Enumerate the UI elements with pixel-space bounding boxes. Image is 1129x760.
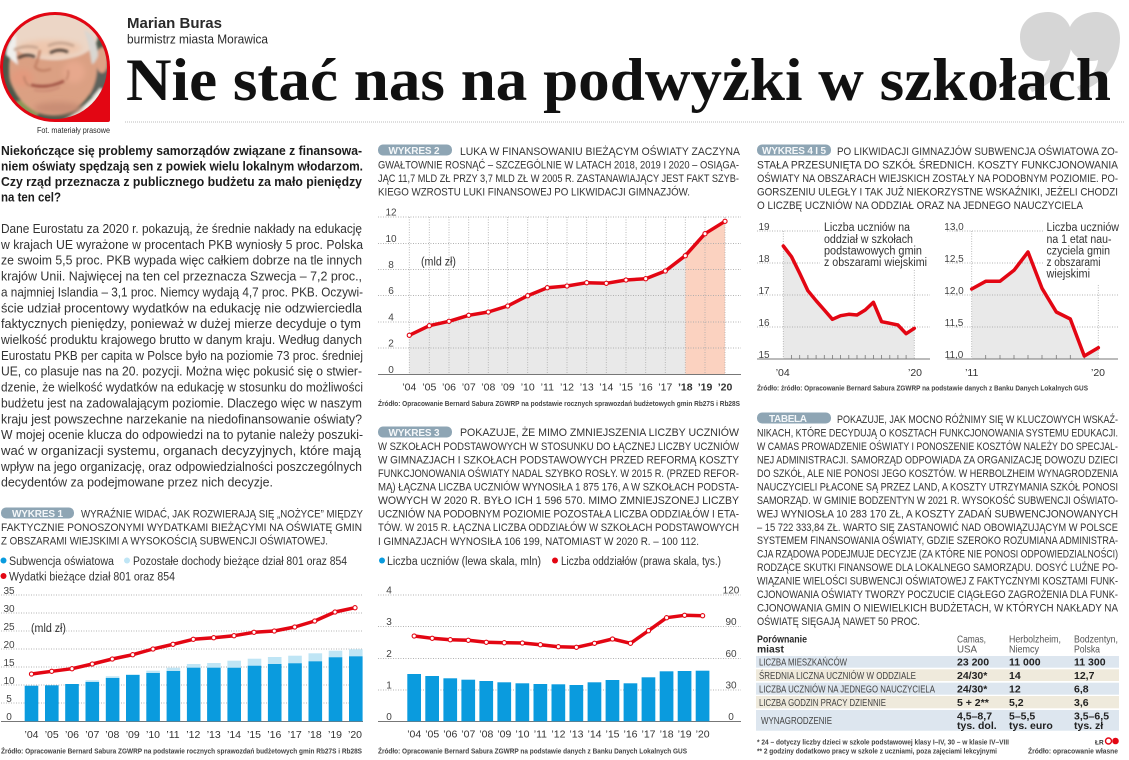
chart: liczba uczniów i oddziałów: ’20 (696, 728, 710, 740)
tag: wykres 2 (378, 144, 452, 157)
chart: uczniowie na oddział: oddział w szkołach (824, 234, 913, 246)
chart: luka w finansowaniu: ’06 (442, 382, 456, 394)
chart: luka w finansowaniu: 12 (385, 208, 397, 218)
chart: luka w finansowaniu: ’16 (639, 382, 653, 394)
body text: a najmniej Islandia – 3,1 proc. Niemcy wydają 4,7 proc. PKB. Oczywi- (1, 284, 363, 299)
chart: uczniowie na etat nauczyciela: wiejskimi (1046, 268, 1090, 280)
legend: wykres 3: Liczba uczniów (lewa skala, mln) (387, 556, 541, 568)
row: godziny pracy: 3,6 (1074, 697, 1089, 709)
photo credit: Fot. materiały prasowe (37, 126, 110, 135)
chart: uczniowie na oddział: 15 (758, 350, 770, 361)
body text: W mojej ocenie klucza do odpowiedzi na to pytanie należy poszuki- (1, 427, 363, 442)
tag: tabela (757, 412, 831, 425)
legend: wykres 1: Subwencja oświatowa (9, 556, 115, 568)
source: wykres 2: Źródło: Opracowanie Bernard Sabura ZGWRP na podstawie rocznych sprawozdań budżetowych gmin Rb27S i Rb28S (378, 399, 740, 408)
chart: subwencja i wydatki: 5 (6, 694, 12, 705)
tag: tabela: TABELA (769, 414, 807, 425)
lead paragraph: Niekończące się problemy samorządów związane z finansowa- (1, 143, 362, 158)
body text: dzenie, że wielkość wydatków na edukację w stosunku do możliwości (1, 380, 363, 395)
legend: wykres 1: Wydatki bieżące dział 801 oraz 854 (9, 572, 176, 584)
chart: liczba uczniów i oddziałów: ’14 (587, 728, 602, 740)
footnotes (757, 738, 1009, 756)
row: godziny pracy: 5,2 (1009, 697, 1024, 709)
row: liczba mieszkańców: LICZBA MIESZKAŃCÓW (759, 656, 847, 668)
chart: liczba uczniów i oddziałów: ’07 (461, 728, 475, 740)
chart: luka w finansowaniu: ’14 (599, 382, 613, 394)
tag: wykres 3: WYKRES 3 (388, 428, 440, 439)
tag: wykres 3 (378, 426, 452, 439)
row: godziny pracy: LICZBA GODZIN PRACY DZIENNIE (759, 697, 886, 709)
chart: luka w finansowaniu: 2 (388, 338, 394, 350)
author role: burmistrz miasta Morawica (127, 32, 268, 46)
chart: luka w finansowaniu (378, 208, 741, 394)
chart: luka w finansowaniu: ’10 (521, 382, 535, 394)
row: wynagrodzenie (756, 710, 1119, 732)
chart: subwencja i wydatki: 30 (3, 604, 15, 615)
icon: decorative quotation mark (1020, 12, 1120, 92)
row: średnia liczba uczniów w oddziale: 14 (1009, 670, 1021, 682)
chart: luka w finansowaniu: ’20 (718, 382, 732, 394)
chart: luka w finansowaniu: ’17 (658, 382, 672, 394)
row: liczba mieszkańców (756, 656, 1119, 668)
chart: liczba uczniów i oddziałów: 0 (728, 712, 734, 723)
chart: liczba uczniów i oddziałów: ’11 (534, 728, 547, 740)
chart: liczba uczniów i oddziałów: 60 (725, 649, 737, 660)
body text: faktycznych pieniędzy, ponieważ w dużej mierze decyduje o tym (1, 316, 361, 331)
chart: uczniowie na etat nauczyciela: z obszarami (1046, 257, 1100, 269)
chart: liczba uczniów i oddziałów: 0 (386, 712, 392, 723)
chart: subwencja i wydatki: ’15 (247, 729, 261, 741)
chart: liczba uczniów i oddziałów: ’08 (479, 728, 493, 740)
chart: luka w finansowaniu: ’11 (541, 382, 554, 394)
chart: subwencja i wydatki: ’20 (348, 729, 362, 741)
panel: wykres 1 (0, 508, 363, 756)
description: wykres 3: W GIMNAZJACH I SZKOŁACH PODSTAWOWYCH PRZED REFORMĄ KOSZTY (378, 454, 739, 466)
chart: liczba uczniów i oddziałów: ’10 (515, 728, 530, 740)
chart: uczniowie na oddział: podstawowych gmin (824, 246, 922, 258)
row: wynagrodzenie: 3,5–6,5 (1074, 710, 1109, 722)
row: średnia liczba uczniów w oddziale: ŚREDNIA LICZNA UCZNIÓW W ODDZIALE (759, 669, 916, 682)
chart: luka w finansowaniu: ’08 (481, 382, 495, 394)
body text: kraju jest powszechne narzekanie na niedofinansowanie oświaty? (1, 411, 362, 426)
chart: subwencja i wydatki: ’19 (328, 729, 342, 741)
chart: subwencja i wydatki: 25 (3, 622, 15, 633)
row: liczba mieszkańców: 23 200 (957, 656, 989, 668)
chart: luka w finansowaniu: ’19 (698, 382, 712, 394)
chart: uczniowie na oddział: z obszarami wiejskimi (824, 257, 927, 269)
chart: uczniowie na oddział: ’04 (776, 367, 790, 379)
row: średnia liczba uczniów w oddziale (756, 669, 1119, 682)
body text: Eurostatu PKB per capita w Polsce było na poziomie 73 proc. średniej (1, 348, 363, 363)
chart: uczniowie na oddział: Liczba uczniów na (824, 222, 911, 234)
row: uczniowie na nauczyciela: LICZBA UCZNIÓW NA JEDNEGO NAUCZYCIELA (759, 682, 935, 696)
panel: tabela (756, 412, 1119, 756)
chart: luka w finansowaniu: ’18 (678, 382, 693, 394)
row: wynagrodzenie: tys. euro (1009, 720, 1053, 732)
author name: Marian Buras (127, 15, 222, 32)
description: wykres 3: TÓW. W 2015 R. ŁĄCZNA LICZBA ODDZIAŁÓW W SZKOŁACH PODSTAWOWYCH (378, 521, 739, 534)
chart: subwencja i wydatki: ’08 (105, 729, 119, 741)
body text (0, 221, 364, 490)
tag: wykres 4 i 5: WYKRES 4 I 5 (762, 146, 826, 157)
chart: subwencja i wydatki: ’18 (308, 729, 322, 741)
chart: liczba uczniów i oddziałów (378, 586, 741, 740)
chart: liczba uczniów i oddziałów: ’19 (678, 728, 692, 740)
description: wykres 1: Z OBSZARAMI WIEJSKIMI A WYSOKOŚCIĄ SUBWENCJI OŚWIATOWEJ. (1, 534, 328, 548)
chart: liczba uczniów i oddziałów: ’09 (497, 728, 511, 740)
chart: liczba uczniów i oddziałów: ’17 (641, 728, 656, 740)
description: wykres 1: FAKTYCZNIE PONOSZONYMI WYDATKAMI BIEŻĄCYMI NA OŚWIATĘ GMIN (1, 521, 362, 534)
source: wykres 1: Źródło: Opracowanie Bernard Sabura ZGWRP na podstawie rocznych sprawozdań budżetowych gmin Rb27S i Rb28S (1, 746, 362, 756)
table header: Bodzentyn, (1074, 634, 1118, 646)
body text: budżetu jest na zadowalającym poziomie. Dlaczego więc w naszym (1, 396, 362, 410)
body text: krajów Unii. Najwięcej na ten cel przeznacza Szwecja – 7,2 proc., (1, 269, 362, 284)
chart: subwencja i wydatki: ’07 (85, 729, 99, 741)
description: wykres 3 (378, 426, 739, 548)
chart: liczba uczniów i oddziałów: ’05 (425, 728, 439, 740)
chart: liczba uczniów i oddziałów: ’04 (407, 728, 421, 740)
chart: uczniowie na etat nauczyciela: ’11 (965, 367, 978, 379)
chart: subwencja i wydatki: 10 (3, 676, 15, 687)
description: wykres 3: UCZNIÓW NA PODOBNYM POZIOMIE POZOSTAŁA LICZBA ODDZIAŁÓW I ETA- (378, 508, 739, 520)
table header: Niemcy (1009, 644, 1040, 656)
chart: uczniowie na etat nauczyciela: 11,5 (945, 318, 964, 329)
lead paragraph: na ten cel? (1, 190, 61, 204)
title: Nie stać nas na podwyżki w szkołach (126, 47, 1111, 113)
row: godziny pracy: 5 + 2** (957, 697, 990, 709)
row: średnia liczba uczniów w oddziale: 24/30* (957, 670, 988, 682)
body text: ście udział procentowy wydatków na edukację nie odzwierciedla (1, 300, 363, 315)
source: wykres 3: Źródło: Opracowanie Bernard Sabura ZGWRP na podstawie danych z Banku Danych Lokalnych GUS (378, 746, 687, 756)
legend: wykres 3 (379, 556, 721, 568)
row: godziny pracy (756, 696, 1119, 709)
description: wykres 3: W SZKOŁACH PODSTAWOWYCH W STOSUNKU DO ŁĄCZNEJ LICZBY UCZNIÓW (378, 440, 739, 453)
chart: subwencja i wydatki: 35 (3, 586, 15, 597)
chart: luka w finansowaniu: ’07 (462, 382, 476, 394)
chart: uczniowie na oddział: 19 (758, 222, 770, 233)
chart: luka w finansowaniu: ’05 (422, 382, 436, 394)
footnotes: ** 2 godziny dodatkowo pracy w szkole z uczniami, poza zajęciami lekcyjnymi (757, 746, 997, 756)
tag: wykres 1: WYKRES 1 (12, 509, 63, 520)
chart: subwencja i wydatki: ’06 (65, 729, 79, 741)
chart: liczba uczniów i oddziałów: 30 (725, 680, 737, 692)
author initials and icons: ŁR (1095, 740, 1104, 746)
row: wynagrodzenie: tys. zł (1074, 720, 1103, 732)
body text: decydentów za podejmowane przez nich decyzje. (1, 475, 273, 490)
lead paragraph: Czy rząd przeznacza z publicznego budżetu za mało pieniędzy (1, 174, 363, 189)
body text: wpływ na jego organizację, oraz odpowiedzialności poszczególnych (0, 459, 362, 474)
row: uczniowie na nauczyciela: 6,8 (1074, 684, 1089, 696)
description: wykres 3: POKAZUJE, ŻE MIMO ZMNIEJSZENIA LICZBY UCZNIÓW (460, 426, 739, 439)
description: tabela (757, 413, 1118, 628)
chart: uczniowie na etat nauczyciela: 12,5 (944, 254, 964, 265)
chart: subwencja i wydatki: ’10 (146, 729, 160, 741)
chart: luka w finansowaniu: 4 (388, 312, 394, 324)
panel: wykres 3 (378, 426, 741, 756)
chart: subwencja i wydatki: ’04 (24, 729, 39, 741)
row: uczniowie na nauczyciela: 24/30* (957, 684, 988, 696)
chart: uczniowie na etat nauczyciela: 11,0 (945, 350, 964, 361)
chart: luka w finansowaniu: 0 (388, 365, 394, 376)
description: wykres 2 (378, 145, 740, 198)
chart: liczba uczniów i oddziałów: 4 (386, 586, 392, 596)
chart: uczniowie na oddział: 18 (758, 254, 770, 265)
description: wykres 3: MĄ) ŁĄCZNA LICZBA UCZNIÓW WYNOSIŁA 1 875 176, A W SZKOŁACH PODSTA- (378, 480, 739, 494)
chart: uczniowie na etat nauczyciela (944, 222, 1122, 379)
table header: Porównanie (757, 634, 807, 646)
description: wykres 3: FUNKCJONOWANIA OŚWIATY NADAL SZYBKO ROSŁY. W 2015 R. (PRZED REFOR- (378, 467, 739, 480)
chart: liczba uczniów i oddziałów: ’18 (660, 728, 674, 740)
row: liczba mieszkańców: 11 000 (1009, 656, 1041, 668)
chart: luka w finansowaniu: 6 (388, 286, 394, 297)
table header (757, 634, 1118, 656)
portrait photo (0, 12, 110, 122)
chart: luka w finansowaniu: 8 (388, 260, 394, 271)
row: średnia liczba uczniów w oddziale: 12,7 (1074, 670, 1095, 682)
description: wykres 2: KIEGO WZROSTU LUKI FINANSOWEJ PO LIKWIDACJI GIMNAZJÓW. (378, 186, 690, 198)
description: wykres 3: I GIMNAZJACH WYNOSIŁA 106 199, NATOMIAST W 2020 R. – 100 112. (378, 536, 699, 548)
chart: uczniowie na etat nauczyciela: Liczba uczniów (1046, 222, 1120, 234)
chart: subwencja i wydatki: ’17 (288, 729, 302, 741)
chart: subwencja i wydatki: ’13 (207, 729, 221, 741)
description: tabela: OŚWIATĘ SIĘGAJĄ NAWET 50 PROC. (757, 615, 920, 628)
chart: subwencja i wydatki: 15 (3, 658, 15, 669)
row: wynagrodzenie: 5–5,5 (1009, 710, 1035, 722)
chart: uczniowie na oddział (757, 222, 930, 379)
chart: subwencja i wydatki: ’05 (45, 729, 59, 741)
chart: liczba uczniów i oddziałów: 90 (725, 617, 737, 628)
chart: uczniowie na oddział: 16 (758, 318, 770, 329)
chart: subwencja i wydatki: ’12 (186, 729, 200, 741)
body text: UE, co plasuje nas na 20. pozycji. Można więc pokusić się o stwier- (1, 364, 362, 379)
row: uczniowie na nauczyciela (756, 682, 1119, 696)
chart: subwencja i wydatki: ’11 (166, 729, 180, 741)
body text: ze swoim 5,5 proc. PKB wypada więc całkiem dobrze na tle innych (1, 253, 362, 268)
tag: wykres 1 (1, 508, 74, 520)
chart: liczba uczniów i oddziałów: 2 (386, 649, 392, 660)
chart: uczniowie na etat nauczyciela: ’20 (1091, 367, 1105, 379)
chart: liczba uczniów i oddziałów: ’16 (623, 728, 638, 740)
table header: Polska (1074, 644, 1100, 656)
chart: luka w finansowaniu: ’13 (580, 382, 594, 394)
source: wykresy 4 i 5: Źródło: źródło: Opracowanie Bernard Sabura ZGWRP na podstawie danych z Banku Danych Lokalnych GUS (757, 384, 1088, 392)
footnotes: * 24 – dotyczy liczby dzieci w szkole podstawowej klasy I–IV, 30 – w klasie IV–VIII (757, 738, 1009, 746)
description: wykres 1: WYRAŹNIE WIDAĆ, JAK ROZWIERAJĄ SIĘ „NOŻYCE” MIĘDZY (81, 508, 363, 520)
table header: Herbolzheim, (1009, 634, 1061, 646)
chart: liczba uczniów i oddziałów: ’15 (605, 728, 620, 740)
description: wykresy 4 i 5 (757, 145, 1118, 212)
chart: liczba uczniów i oddziałów: ’06 (443, 728, 457, 740)
lead paragraph: niem oświaty spędzają sen z powiek wielu lokalnym włodarzom. (1, 158, 363, 174)
description: wykres 2: JĄC 11,7 MLD ZŁ PRZY 3,7 MLD ZŁ W 2005 R. ZASTANAWIAJĄCY JEST FAKT SZYB- (378, 173, 739, 185)
chart: uczniowie na oddział: 17 (758, 286, 770, 297)
author initials and icons (1095, 738, 1119, 746)
row: wynagrodzenie: tys. dol. (957, 720, 997, 732)
body text: wać w organizacji systemu, organach decyzyjnych, które mają (0, 443, 362, 458)
legend: wykres 1 (0, 556, 348, 584)
chart: liczba uczniów i oddziałów: 3 (386, 617, 392, 628)
chart: liczba uczniów i oddziałów: ’13 (569, 728, 584, 740)
description: wykres 2: GWAŁTOWNIE ROSNĄĆ – SZCZEGÓLNIE W LATACH 2018, 2019 I 2020 – OSIĄGA- (378, 158, 739, 172)
chart: liczba uczniów i oddziałów: 1 (386, 680, 392, 692)
description: wykres 1 (1, 508, 363, 548)
chart: subwencja i wydatki: 0 (6, 712, 12, 723)
chart: luka w finansowaniu: ’12 (560, 382, 574, 394)
chart: uczniowie na etat nauczyciela: 12,0 (944, 286, 964, 297)
table header: USA (957, 644, 977, 656)
row: wynagrodzenie: WYNAGRODZENIE (761, 715, 832, 727)
description: wykres 3: WOWYCH W 2020 R. BYŁO ICH 1 596 570. MIMO ZMNIEJSZONEJ LICZBY (378, 495, 739, 507)
row: liczba mieszkańców: 11 300 (1074, 656, 1106, 668)
chart: subwencja i wydatki: ’14 (227, 729, 241, 741)
body text: Dane Eurostatu za 2020 r. pokazują, że średnie nakłady na edukację (1, 221, 362, 236)
panel: wykresy 4 i 5 (757, 144, 1122, 392)
description: wykres 2: LUKA W FINANSOWANIU BIEŻĄCYM OŚWIATY ZACZYNA (460, 145, 740, 158)
table header: miast (757, 644, 784, 656)
panel: wykres 2 (378, 144, 741, 408)
chart: luka w finansowaniu: ’15 (619, 382, 633, 394)
chart: uczniowie na oddział: ’20 (908, 367, 922, 379)
chart: liczba uczniów i oddziałów: 120 (723, 586, 740, 596)
chart: uczniowie na etat nauczyciela: na 1 etat nau- (1046, 234, 1112, 246)
legend: wykres 3: Liczba oddziałów (prawa skala, tys.) (561, 556, 721, 568)
table header: Camas, (957, 634, 986, 646)
body text: wielkość produktu krajowego brutto w danym kraju. Według danych (0, 332, 362, 347)
chart: luka w finansowaniu: ’09 (501, 382, 515, 394)
tag: wykres 2: WYKRES 2 (388, 146, 440, 157)
chart: uczniowie na etat nauczyciela: czyciela gmin (1046, 246, 1110, 258)
chart: luka w finansowaniu: (mld zł) (421, 256, 456, 268)
chart: subwencja i wydatki (1, 586, 363, 741)
chart: luka w finansowaniu: ’04 (402, 382, 416, 394)
lead paragraph (1, 143, 363, 204)
body text: w krajach UE wyrażone w procentach PKB wyniosły 5 proc. Polska (0, 237, 364, 252)
row: wynagrodzenie: 4,5–8,7 (957, 710, 992, 722)
chart: subwencja i wydatki: ’09 (126, 729, 140, 741)
table: porównanie miast (756, 634, 1119, 732)
chart: subwencja i wydatki: (mld zł) (31, 623, 66, 635)
chart: liczba uczniów i oddziałów: ’12 (551, 728, 566, 740)
chart: uczniowie na etat nauczyciela: 13,0 (944, 222, 964, 233)
description: wykresy 4 i 5: O LICZBĘ UCZNIÓW NA ODDZIAŁ ORAZ NA JEDNEGO NAUCZYCIELA (757, 199, 1083, 212)
chart: subwencja i wydatki: 20 (3, 640, 15, 651)
chart: luka w finansowaniu: 10 (385, 234, 397, 245)
source: tabela: Źródło: opracowanie własne (1028, 746, 1118, 756)
row: uczniowie na nauczyciela: 12 (1009, 684, 1021, 696)
chart: subwencja i wydatki: ’16 (267, 729, 281, 741)
legend: wykres 1: Pozostałe dochody bieżące dział 801 oraz 854 (133, 556, 348, 568)
